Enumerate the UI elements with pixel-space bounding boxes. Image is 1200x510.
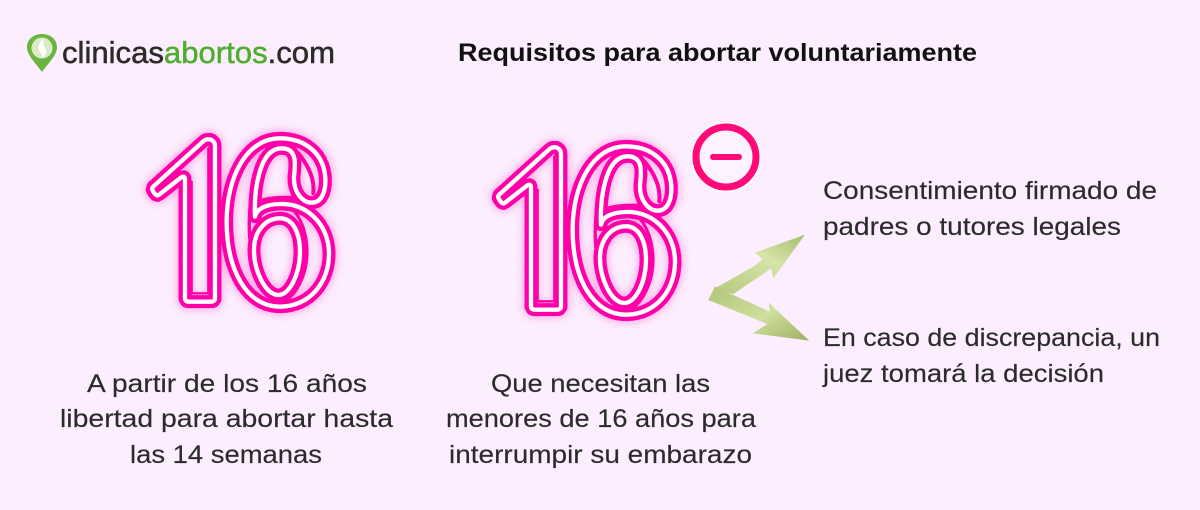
text: left caption: libertad para abortar hasta	[60, 405, 393, 433]
logo	[27, 34, 335, 72]
icon: location pin	[27, 34, 57, 72]
text: judge requirement: juez tomará la decisión	[822, 360, 1104, 388]
text: consent requirement: Consentimiento firmado de	[823, 177, 1157, 205]
logo wordmark: clinicasabortos.com	[62, 36, 335, 70]
title: Requisitos para abortar voluntariamente	[458, 39, 977, 67]
neon number 16 left	[152, 138, 329, 307]
neon number 16 right	[498, 146, 675, 315]
icon: minus sign in circle	[690, 122, 762, 192]
text: judge requirement: En caso de discrepancia, un	[823, 324, 1160, 352]
text: center caption	[446, 370, 756, 469]
text: center caption: menores de 16 años para	[446, 405, 756, 433]
arrow: down to judge text	[708, 287, 809, 341]
text: judge requirement	[822, 324, 1160, 388]
text: left caption: A partir de los 16 años	[87, 370, 367, 398]
text: center caption: interrumpir su embarazo	[449, 441, 752, 469]
text: center caption: Que necesitan las	[491, 370, 710, 398]
text: consent requirement: padres o tutores legales	[823, 213, 1121, 241]
text: consent requirement	[823, 177, 1157, 241]
text: left caption	[60, 370, 393, 469]
arrow: up to consent text	[715, 235, 805, 294]
text: left caption: las 14 semanas	[130, 441, 322, 469]
